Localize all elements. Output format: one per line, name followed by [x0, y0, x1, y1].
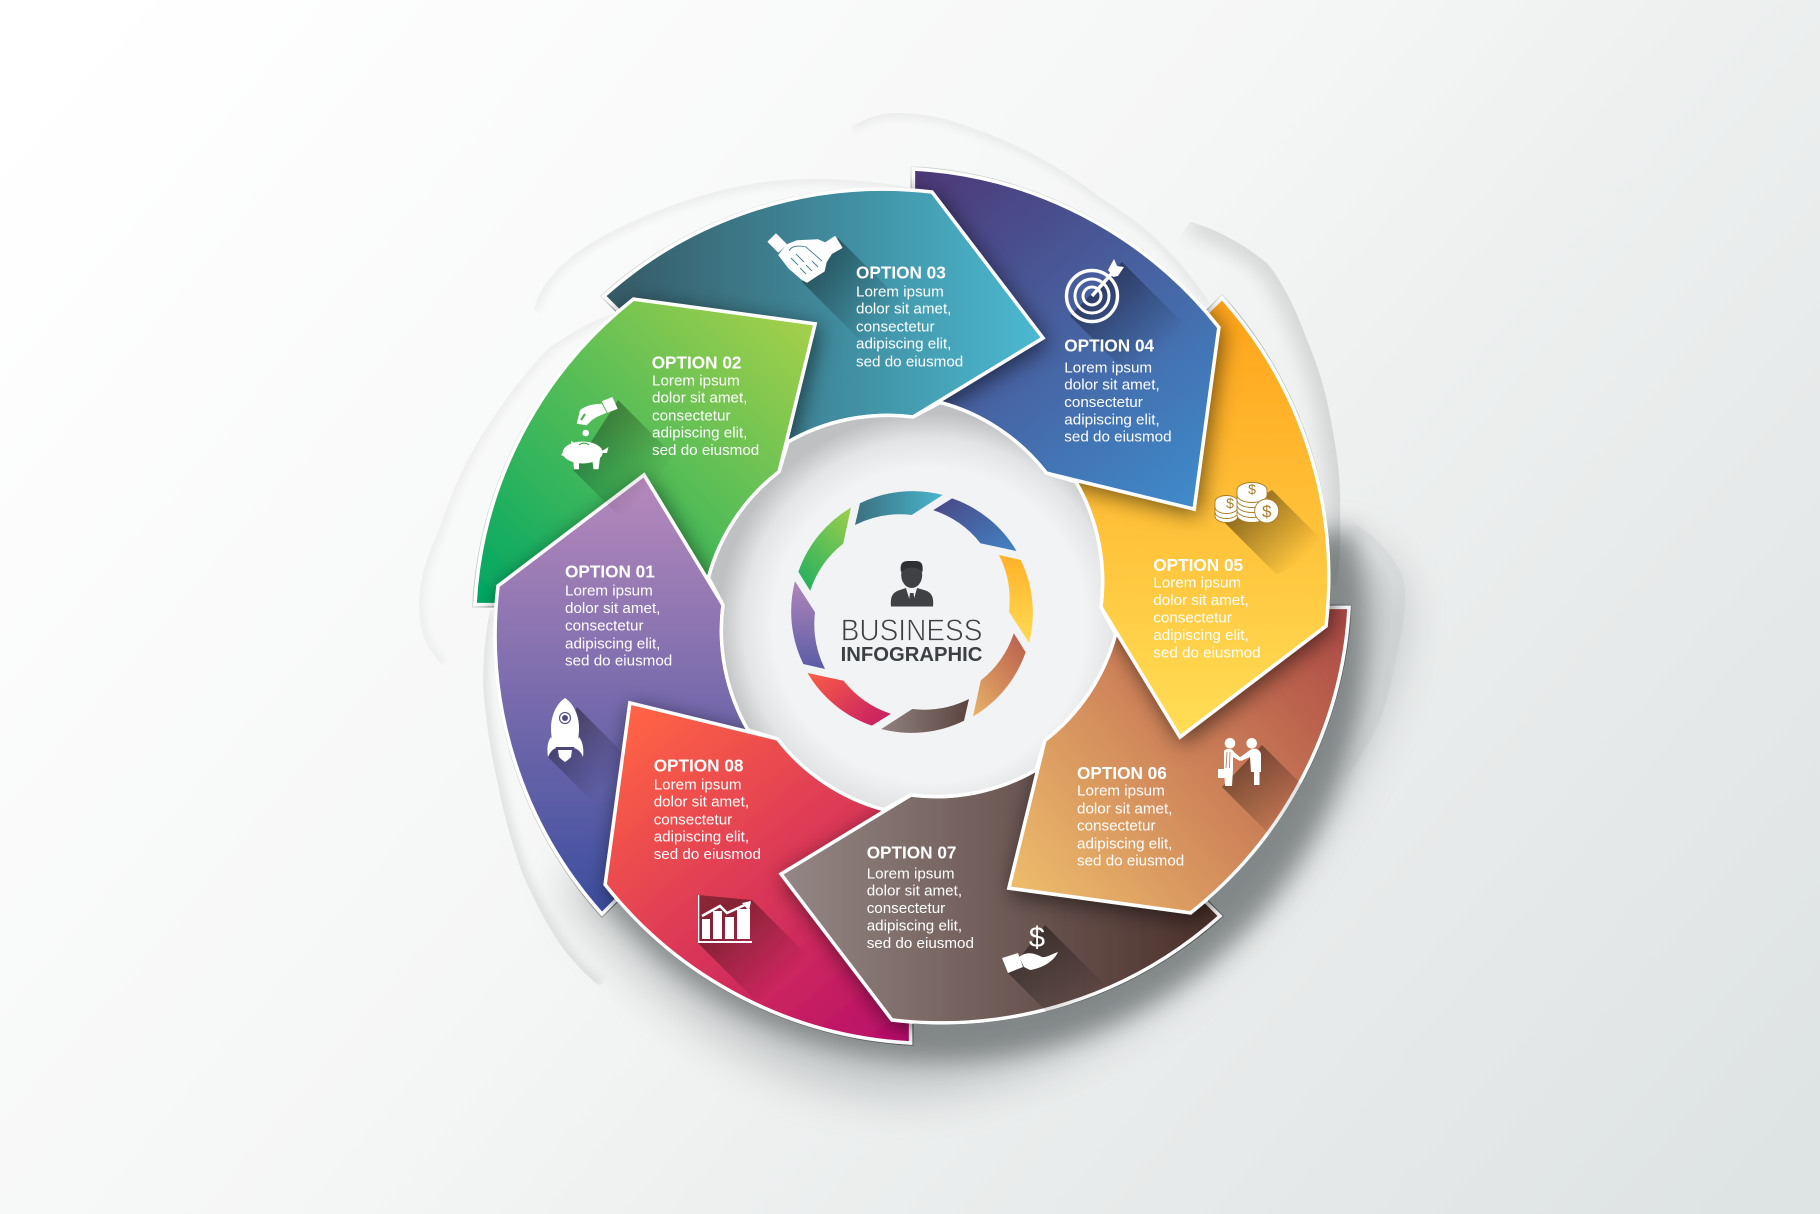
icon: two businessmen shaking hands [1218, 738, 1301, 834]
text: option 02: adipiscing elit, [652, 425, 747, 442]
text: option 05 [1153, 555, 1261, 661]
text: option 06: dolor sit amet, [1077, 800, 1172, 817]
text: option 02: sed do eiusmod [652, 442, 759, 459]
text: option 06 [1077, 763, 1184, 870]
text: option 06: consectetur [1077, 818, 1156, 835]
arrow segment: option 03 [604, 189, 1043, 442]
arrow segment: option 06 [1002, 604, 1352, 932]
text: option 08: Lorem ipsum [654, 776, 741, 793]
text: option 01: dolor sit amet, [565, 600, 660, 617]
text: option 07: consectetur [867, 900, 945, 917]
wheel of eight arrow segments [472, 166, 1352, 1046]
arrow segment: option 01 [495, 475, 748, 914]
wheel cast shadow lower right [556, 513, 1420, 1114]
text: option 08: OPTION 08 [654, 756, 744, 776]
text: option 06: sed do eiusmod [1077, 853, 1184, 870]
text: option 03: adipiscing elit, [856, 336, 951, 353]
centre title [841, 613, 982, 666]
text: option 06: OPTION 06 [1077, 763, 1167, 783]
text: option 02: dolor sit amet, [652, 390, 747, 407]
icon: rocket [547, 698, 626, 794]
centre title: INFOGRAPHIC [841, 644, 982, 666]
text: option 08: sed do eiusmod [654, 846, 761, 863]
text: option 01: Lorem ipsum [565, 583, 653, 600]
text: option 03 [856, 262, 963, 370]
text: option 04 [1064, 336, 1172, 446]
text: option 03: consectetur [856, 318, 935, 335]
text: option 07 [867, 842, 974, 952]
icon: target with dart [1064, 259, 1178, 371]
text: option 04: adipiscing elit, [1064, 411, 1160, 428]
text: option 02: Lorem ipsum [652, 372, 740, 389]
text: option 05: Lorem ipsum [1153, 575, 1241, 592]
icon: hand dropping coin into piggy bank [561, 397, 669, 510]
arrow segment: option 05 [1076, 298, 1329, 737]
text: option 05: OPTION 05 [1153, 555, 1244, 575]
arrow head: option 02 overlapping option 03 [604, 293, 830, 460]
text: option 04: OPTION 04 [1064, 336, 1155, 356]
text: option 02: OPTION 02 [652, 352, 741, 372]
text: option 05: sed do eiusmod [1153, 644, 1261, 661]
text: option 01: sed do eiusmod [565, 653, 672, 670]
text: option 04: Lorem ipsum [1064, 359, 1152, 376]
text: option 08 [654, 756, 761, 863]
arrow segment: option 02 [472, 305, 752, 614]
centre title: BUSINESS [841, 613, 982, 648]
text: option 01: consectetur [565, 618, 644, 635]
text: option 07: sed do eiusmod [867, 935, 974, 952]
text: option 05: dolor sit amet, [1153, 592, 1249, 609]
icon: coin stacks: $ [1248, 481, 1256, 497]
paper swirl contours behind the wheel [419, 113, 1340, 986]
text: option 08: dolor sit amet, [654, 794, 749, 811]
text: option 08: consectetur [654, 811, 732, 828]
icon: rising bar chart [698, 895, 802, 998]
text: option 03: OPTION 03 [856, 262, 946, 282]
text: option 07: adipiscing elit, [867, 917, 962, 934]
text: option 02 [652, 352, 759, 459]
text: option 03: Lorem ipsum [856, 284, 944, 301]
text: option 05: adipiscing elit, [1153, 627, 1249, 644]
arrow segment: option 08 [594, 696, 917, 1046]
text: option 04: consectetur [1064, 394, 1143, 411]
arrow segment: option 07 [781, 770, 1220, 1023]
text: option 01: adipiscing elit, [565, 635, 660, 652]
text: option 04: sed do eiusmod [1064, 429, 1172, 446]
text: option 07: Lorem ipsum [867, 865, 954, 882]
icon: hand holding dollar [1002, 925, 1094, 1012]
text: option 01: OPTION 01 [565, 562, 655, 582]
text: option 02: consectetur [652, 407, 731, 424]
icon: coin stacks: $ [1262, 502, 1272, 521]
text: option 06: adipiscing elit, [1077, 835, 1172, 852]
icon: coin stacks: $ [1226, 495, 1234, 511]
text: option 07: OPTION 07 [867, 842, 956, 862]
text: option 08: adipiscing elit, [654, 829, 749, 846]
text: option 05: consectetur [1153, 609, 1232, 626]
text: option 04: dolor sit amet, [1064, 377, 1160, 394]
mini ring of eight coloured arrows [786, 486, 1038, 738]
icon: handshake [768, 234, 896, 335]
icon: hand holding dollar: $ [1029, 922, 1045, 954]
text: option 07: dolor sit amet, [867, 883, 962, 900]
centre disc [708, 402, 1116, 810]
icon: businessman [891, 561, 933, 606]
text: option 03: dolor sit amet, [856, 301, 951, 318]
text: option 06: Lorem ipsum [1077, 783, 1165, 800]
text: option 01 [565, 562, 672, 670]
text: option 03: sed do eiusmod [856, 353, 963, 370]
arrow segment: option 04 [910, 166, 1238, 528]
icon: coin stacks [1215, 481, 1327, 575]
